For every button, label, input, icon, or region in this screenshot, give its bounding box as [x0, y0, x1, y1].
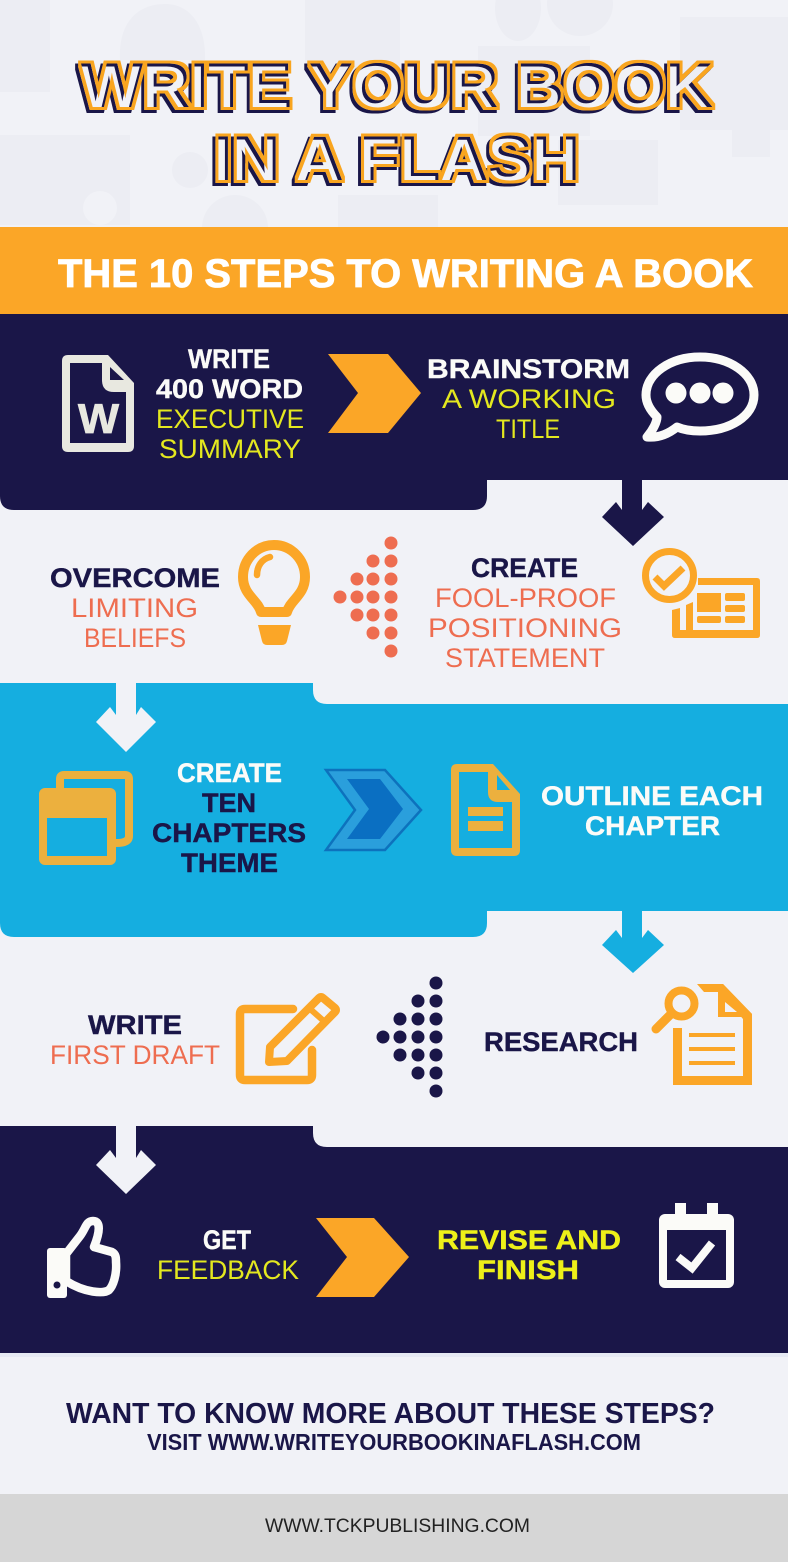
text: brainstorm a working title: TITLE: [496, 414, 560, 444]
text: create fool-proof positioning statement: CREATE: [471, 553, 578, 583]
text: outline each chapter: OUTLINE EACH: [541, 781, 763, 811]
text: write 400 word executive summary: [156, 344, 304, 464]
text: revise and finish: [437, 1225, 621, 1285]
text: create fool-proof positioning statement: FOOL-PROOF: [435, 583, 616, 613]
arrow: navy down: [602, 480, 664, 546]
icon: word document: W: [78, 395, 119, 442]
text: write 400 word executive summary: 400 WORD: [156, 374, 303, 404]
text: revise and finish: FINISH: [477, 1255, 579, 1285]
footer bar: [0, 1494, 788, 1562]
arrow: blue double chevron: [326, 770, 421, 850]
text: get feedback: [157, 1225, 299, 1285]
title shadow: [78, 54, 710, 197]
title outline: [81, 51, 713, 194]
title outline: IN A FLASH: [214, 124, 580, 194]
title: [78, 51, 713, 197]
text: write first draft: [50, 1010, 220, 1070]
text: create ten chapters theme: CHAPTERS: [152, 818, 306, 848]
title shadow: WRITE YOUR BOOK: [78, 54, 710, 124]
icon: pencil and pad: [240, 997, 336, 1080]
text: get feedback: GET: [203, 1225, 251, 1255]
text: brainstorm a working title: BRAINSTORM: [427, 354, 630, 384]
text: get feedback: FEEDBACK: [157, 1255, 299, 1285]
banner: the 10 steps: THE 10 STEPS TO WRITING A BOOK: [58, 252, 753, 296]
text: outline each chapter: CHAPTER: [585, 811, 720, 841]
text: create ten chapters theme: [152, 758, 306, 878]
icon: thumbs up: [47, 1221, 116, 1298]
text: create fool-proof positioning statement: POSITIONING: [428, 613, 622, 643]
banner: the 10 steps: [0, 227, 788, 314]
text: create fool-proof positioning statement: STATEMENT: [445, 643, 605, 673]
text: write 400 word executive summary: EXECUTIVE: [156, 404, 304, 434]
text: brainstorm a working title: A WORKING: [442, 384, 616, 414]
icon: document: [451, 764, 520, 856]
text: write first draft: WRITE: [88, 1010, 182, 1040]
text: overcome limiting beliefs: LIMITING: [71, 593, 198, 623]
panel: blue steps 5-6: [0, 683, 788, 937]
arrow: white down (to navy panel): [96, 1126, 156, 1194]
text: create ten chapters theme: TEN: [202, 788, 256, 818]
icon: word document: [62, 355, 134, 452]
text: call to action: VISIT WWW.WRITEYOURBOOKINAFLASH.COM: [147, 1429, 641, 1455]
text: research: RESEARCH: [484, 1027, 638, 1057]
arrow: navy dots: [376, 976, 442, 1098]
arrow: orange chevron: [316, 1218, 409, 1297]
text: revise and finish: REVISE AND: [437, 1225, 621, 1255]
text: call to action: WANT TO KNOW MORE ABOUT THESE STEPS?: [66, 1398, 715, 1430]
divider line: [0, 1353, 788, 1357]
arrow: orange chevron: [328, 354, 421, 433]
text: call to action: [66, 1398, 715, 1455]
icon: calendar with check: [659, 1203, 734, 1288]
icon: magnifier and document: [656, 984, 752, 1085]
text: overcome limiting beliefs: OVERCOME: [50, 563, 220, 593]
background: faint ghost icons: [0, 0, 788, 261]
text: brainstorm a working title: [427, 354, 630, 444]
text: outline each chapter: [541, 781, 763, 841]
arrow: blue down: [602, 911, 664, 973]
icon: speech bubble: [646, 357, 754, 437]
text: write first draft: FIRST DRAFT: [50, 1040, 220, 1070]
text: footer url: WWW.TCKPUBLISHING.COM: [265, 1516, 530, 1537]
text: create fool-proof positioning statement: [428, 553, 622, 673]
panel: navy steps 1-2: [0, 314, 788, 510]
arrow: white down (to blue panel): [96, 683, 156, 752]
text: overcome limiting beliefs: BELIEFS: [84, 623, 186, 653]
title shadow: IN A FLASH: [211, 127, 577, 197]
icon: checkmark and newspaper: [646, 552, 760, 638]
text: overcome limiting beliefs: [50, 563, 220, 653]
text: write 400 word executive summary: SUMMARY: [159, 434, 301, 464]
text: write 400 word executive summary: WRITE: [188, 344, 270, 374]
panel: navy steps 9-10: [0, 1126, 788, 1353]
icon: copied pages: [39, 775, 129, 865]
text: create ten chapters theme: THEME: [181, 848, 278, 878]
text: create ten chapters theme: CREATE: [177, 758, 282, 788]
arrow: coral dots: [334, 536, 398, 658]
icon: light bulb: [243, 545, 305, 645]
title outline: WRITE YOUR BOOK: [81, 51, 713, 121]
